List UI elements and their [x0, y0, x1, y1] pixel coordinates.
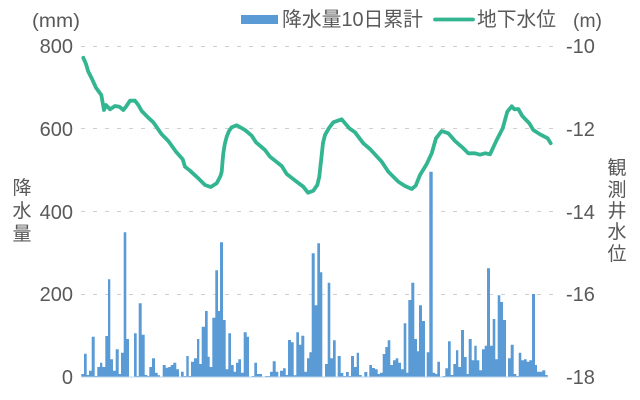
left axis labels: 800 — [40, 36, 73, 58]
legend: groundwater level — [435, 8, 556, 31]
right axis title: 井 — [607, 200, 627, 222]
legend: groundwater level: 地下水位 — [477, 8, 556, 31]
right axis labels: -18 — [566, 367, 595, 389]
bar chart: 10-day cumulative rainfall — [81, 172, 548, 377]
left axis unit: (mm) — [32, 11, 80, 32]
right axis title: 観 — [607, 157, 627, 179]
left axis labels — [40, 36, 73, 389]
right axis title — [607, 157, 627, 265]
right axis title: 水 — [607, 221, 627, 243]
left axis labels: 600 — [40, 119, 73, 141]
right axis unit: (m) — [573, 11, 602, 32]
left axis title: 水 — [12, 200, 32, 222]
line chart: groundwater level — [83, 58, 551, 193]
left axis title — [12, 177, 32, 245]
right axis labels: -10 — [566, 36, 595, 58]
right axis labels: -16 — [566, 284, 595, 306]
right axis labels: -12 — [566, 119, 595, 141]
right axis title: 位 — [607, 243, 627, 265]
right axis title: 測 — [607, 179, 627, 201]
right axis labels: -14 — [566, 202, 595, 224]
left axis labels: 400 — [40, 202, 73, 224]
right axis labels — [566, 36, 595, 389]
left axis labels: 200 — [40, 284, 73, 306]
left axis title: 降 — [12, 177, 32, 199]
left axis title: 量 — [12, 224, 32, 245]
left axis labels: 0 — [62, 367, 73, 389]
legend: rainfall: 降水量10日累計 — [282, 8, 423, 31]
